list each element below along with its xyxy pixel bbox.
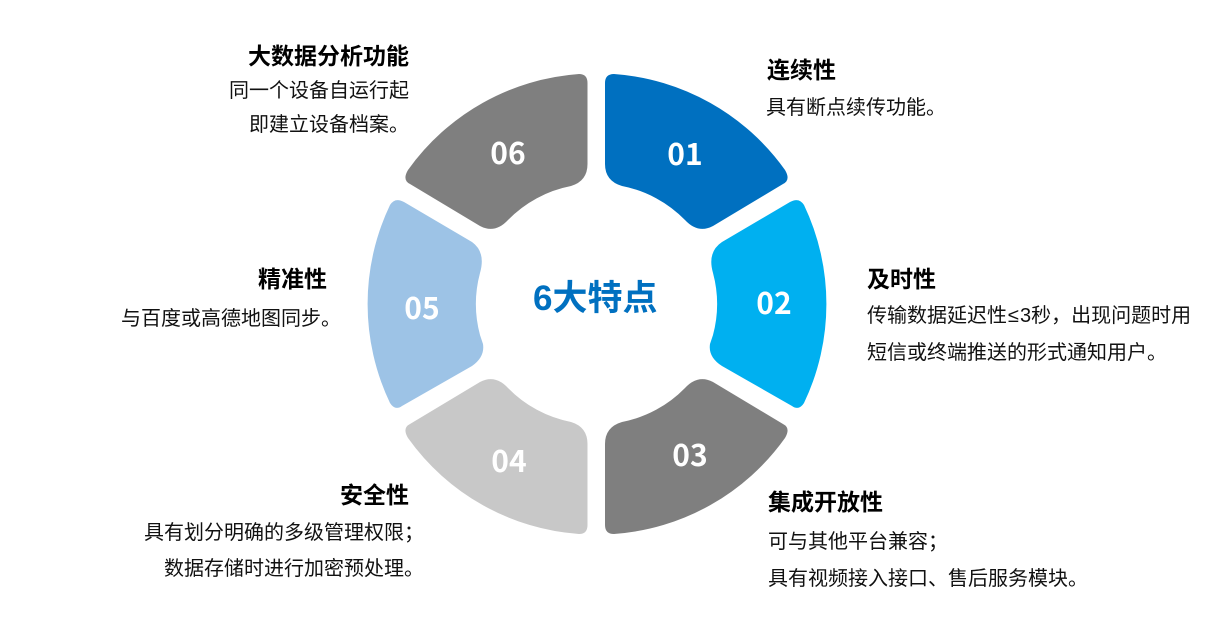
panel: segment 03 — [605, 379, 788, 534]
text block: 及时性: 传输数据延迟性≤3秒，出现问题时用 — [867, 304, 1191, 327]
panel: segment 02 — [710, 200, 826, 408]
text block: 精准性: 与百度或高德地图同步。 — [121, 307, 341, 330]
panel: segment 05: 05 — [404, 284, 440, 328]
text block: 及时性: 及时性 — [867, 266, 936, 292]
panel: segment 04 — [405, 379, 588, 534]
panel: segment 03: 03 — [672, 431, 708, 475]
panel: segment 01 — [605, 74, 788, 229]
panel: segment 06 — [405, 74, 588, 229]
text block: 集成开放性: 集成开放性 — [768, 489, 883, 515]
panel: segment 05 — [368, 200, 483, 408]
text block: 集成开放性: 可与其他平台兼容； — [768, 530, 948, 553]
text block: 安全性: 数据存储时进行加密预处理。 — [164, 557, 424, 580]
panel: segment 02: 02 — [756, 279, 792, 323]
text block: 及时性 — [867, 266, 1191, 364]
text block: 集成开放性 — [768, 489, 1088, 590]
text block: 大数据分析功能: 同一个设备自运行起 — [229, 79, 409, 102]
text block: 精准性: 精准性 — [258, 266, 327, 292]
text block: 大数据分析功能: 大数据分析功能 — [248, 43, 409, 69]
text block: 大数据分析功能: 即建立设备档案。 — [249, 113, 409, 136]
text block: 大数据分析功能 — [229, 43, 409, 136]
panel: segment 01: 01 — [667, 130, 703, 174]
text block: 及时性: 短信或终端推送的形式通知用户。 — [867, 341, 1167, 364]
text block: 安全性 — [144, 482, 424, 580]
text block: 安全性: 安全性 — [340, 482, 409, 508]
text block: 连续性: 连续性 — [767, 57, 836, 83]
panel: segment 04: 04 — [491, 437, 527, 481]
center title: 6大特点 — [533, 279, 657, 318]
text block: 连续性: 具有断点续传功能。 — [766, 96, 946, 119]
text block: 安全性: 具有划分明确的多级管理权限； — [144, 521, 424, 544]
text block: 精准性 — [121, 266, 341, 330]
panel: segment 06: 06 — [490, 129, 526, 173]
text block: 连续性 — [766, 57, 946, 119]
text block: 集成开放性: 具有视频接入接口、售后服务模块。 — [768, 567, 1088, 590]
